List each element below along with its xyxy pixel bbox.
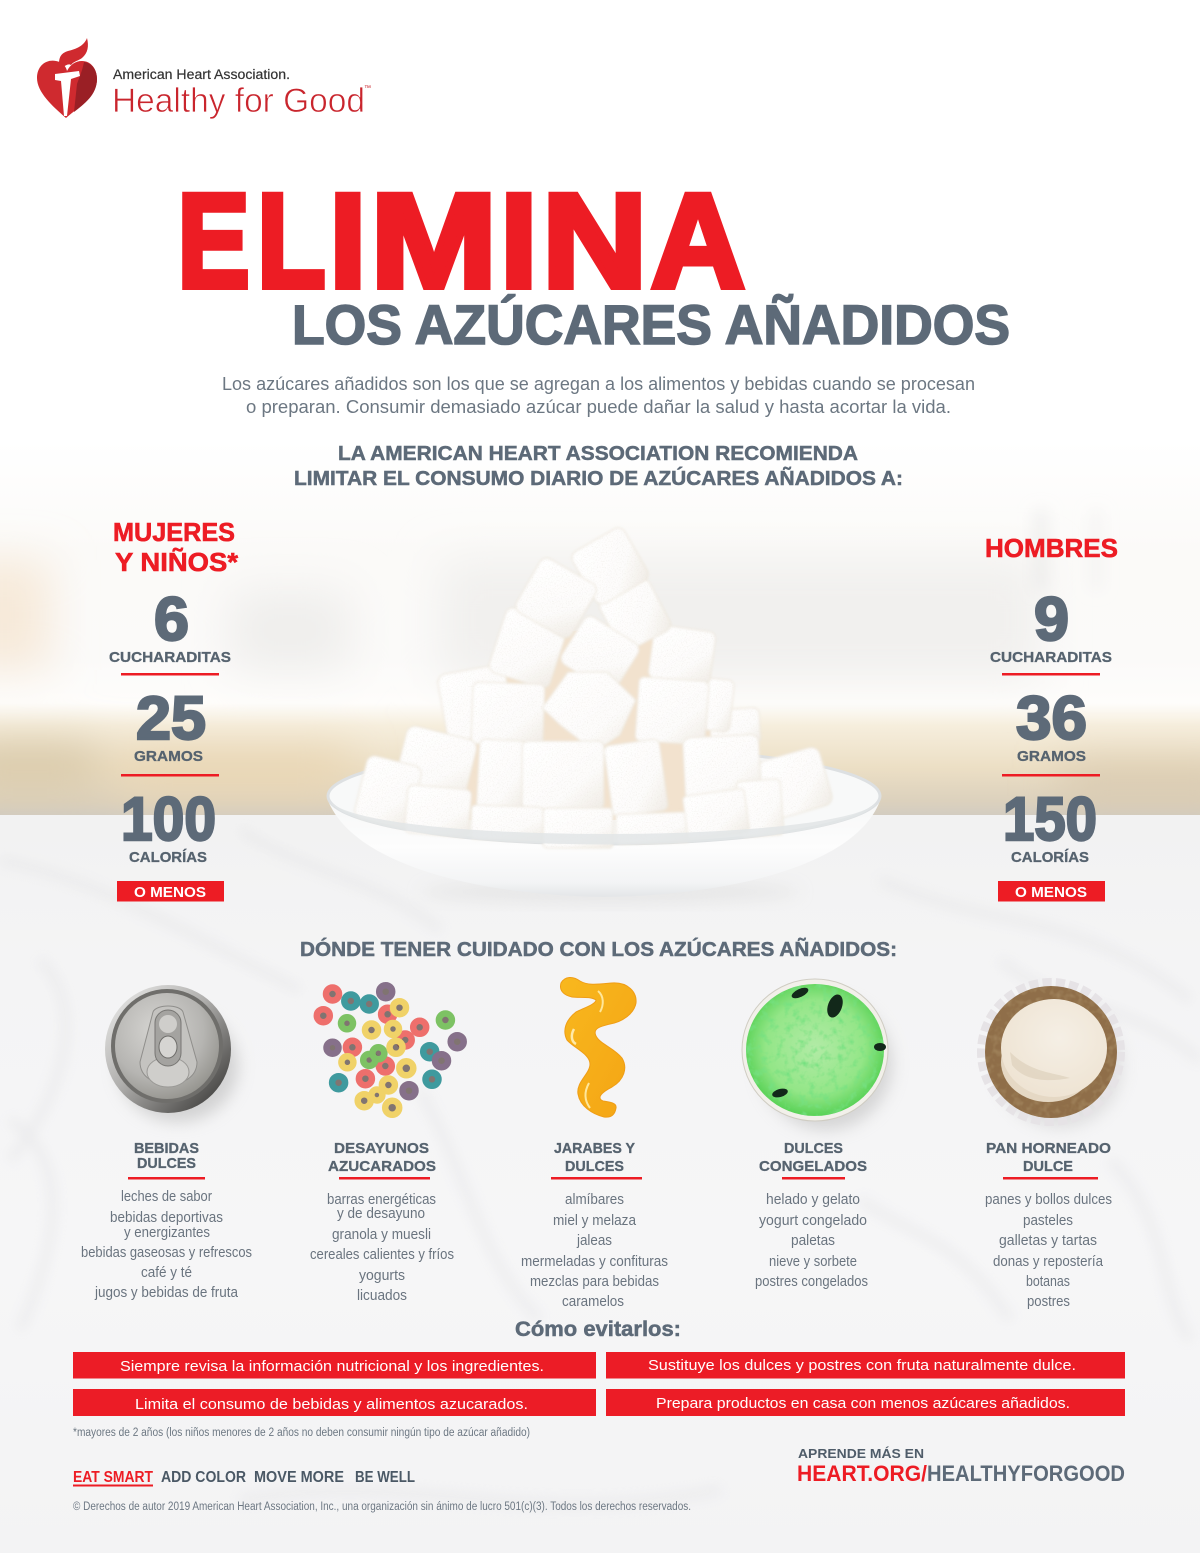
panel: sweet baked goods bbox=[983, 984, 1122, 1310]
badge: o menos bbox=[117, 881, 224, 902]
footer nav: eat smart, add color, move more, be well: BE WELL bbox=[355, 1469, 415, 1486]
list: desayunos azucarados: barras energéticas bbox=[327, 1192, 436, 1208]
heading: dulces congelados: CONGELADOS bbox=[759, 1158, 867, 1175]
recommendation heading bbox=[294, 442, 903, 490]
intro paragraph bbox=[222, 374, 975, 417]
call to action: heart.org/healthyforgood: HEART.ORG/ bbox=[797, 1461, 927, 1486]
title: ELIMINA: I bbox=[500, 167, 538, 316]
panel: syrups and sweets bbox=[521, 977, 668, 1310]
title: ELIMINA: E bbox=[177, 167, 250, 316]
footer nav: eat smart, add color, move more, be well bbox=[73, 1469, 415, 1486]
stat: 6 cucharaditas: CUCHARADITAS bbox=[109, 649, 231, 666]
intro paragraph: Los azúcares añadidos son los que se agregan a los alimentos y bebidas cuando se procesan bbox=[222, 374, 975, 394]
stat: 36 gramos bbox=[1002, 684, 1100, 776]
call to action: heart.org/healthyforgood bbox=[797, 1446, 1125, 1486]
stat: 150 calorías: 150 bbox=[1003, 785, 1097, 853]
footer nav: eat smart, add color, move more, be well: ADD COLOR bbox=[161, 1469, 246, 1486]
heading: pan horneado dulce bbox=[986, 1140, 1111, 1180]
list: pan horneado dulce: botanas bbox=[1026, 1274, 1070, 1290]
heading: mujeres y niños: MUJERES bbox=[113, 517, 235, 547]
stat: 100 calorías: CALORÍAS bbox=[129, 849, 207, 866]
list: jarabes y dulces: mermeladas y confituras bbox=[521, 1254, 668, 1270]
illustration: bowl of sugar cubes bbox=[327, 525, 881, 904]
logo text: Healthy for Good: Healthy for Good bbox=[112, 82, 365, 120]
list: pan horneado dulce: panes y bollos dulces bbox=[985, 1192, 1112, 1208]
heading: desayunos azucarados: AZUCARADOS bbox=[328, 1158, 436, 1175]
heading: dulces congelados bbox=[759, 1140, 867, 1180]
recommendation heading: LA AMERICAN HEART ASSOCIATION RECOMIENDA bbox=[338, 442, 858, 465]
list: jarabes y dulces: miel y melaza bbox=[553, 1213, 637, 1229]
section heading: where to watch for sugars: DÓNDE TENER CUIDADO CON LOS AZÚCARES AÑADIDOS: bbox=[300, 937, 897, 961]
list: pan horneado dulce: postres bbox=[1027, 1294, 1070, 1310]
stat: 9 cucharaditas: CUCHARADITAS bbox=[990, 649, 1112, 666]
list: jarabes y dulces: mezclas para bebidas bbox=[530, 1274, 659, 1290]
icon: heart and torch bbox=[37, 38, 97, 118]
subtitle: los azúcares añadidos: LOS AZÚCARES AÑADIDOS bbox=[292, 293, 1010, 356]
heading: jarabes y dulces: JARABES Y bbox=[554, 1140, 635, 1157]
stat: 25 gramos: 25 bbox=[136, 684, 206, 752]
title: ELIMINA: N bbox=[542, 167, 647, 316]
heading: bebidas dulces: BEBIDAS bbox=[134, 1140, 199, 1157]
sugar cubes bbox=[353, 525, 834, 848]
stat: 6 cucharaditas bbox=[109, 585, 231, 676]
list: bebidas dulces: café y té bbox=[141, 1265, 192, 1281]
heading: mujeres y niños bbox=[113, 517, 239, 577]
title: ELIMINA: I bbox=[329, 167, 366, 316]
panel: men limits bbox=[985, 533, 1118, 902]
icon: honey syrup swirl bbox=[560, 977, 636, 1117]
panel: frozen sweets bbox=[742, 979, 892, 1290]
footer nav: eat smart, add color, move more, be well: EAT SMART bbox=[73, 1469, 153, 1486]
logo trademark: ™ bbox=[364, 85, 371, 92]
list: desayunos azucarados: granola y muesli bbox=[332, 1227, 431, 1243]
copyright: © Derechos de autor 2019 American Heart Association, Inc., una organización sin ánimo de lucro 501(c)(3). Todos los derechos reservados. bbox=[73, 1501, 691, 1513]
list: bebidas dulces: jugos y bebidas de fruta bbox=[94, 1285, 239, 1301]
heading: hombres: HOMBRES bbox=[985, 533, 1118, 563]
title: ELIMINA: L bbox=[257, 167, 326, 316]
list: bebidas dulces: bebidas deportivas bbox=[110, 1210, 223, 1226]
list: desayunos azucarados bbox=[310, 1192, 454, 1304]
warm shadow inside the pile bbox=[420, 620, 760, 820]
heading: desayunos azucarados bbox=[328, 1140, 436, 1180]
stat: 6 cucharaditas: 6 bbox=[154, 585, 189, 653]
heading: pan horneado dulce: DULCE bbox=[1023, 1158, 1073, 1175]
tip: prepara productos en casa: Prepara productos en casa con menos azúcares añadidos. bbox=[656, 1395, 1070, 1412]
heading: mujeres y niños: Y NIÑOS* bbox=[115, 547, 239, 577]
stat: 36 gramos: 36 bbox=[1016, 684, 1087, 752]
title: ELIMINA: M bbox=[370, 167, 497, 316]
list: dulces congelados: postres congelados bbox=[755, 1274, 868, 1290]
call to action: heart.org/healthyforgood: APRENDE MÁS EN bbox=[798, 1446, 924, 1461]
bowl rim front bbox=[328, 798, 880, 844]
panel: women and children limits bbox=[109, 517, 239, 902]
heading: bebidas dulces bbox=[128, 1140, 205, 1180]
list: dulces congelados bbox=[755, 1192, 868, 1290]
tip: limita el consumo bbox=[73, 1389, 596, 1416]
list: bebidas dulces: leches de sabor bbox=[121, 1189, 212, 1205]
stat: 100 calorías: 100 bbox=[121, 785, 216, 853]
list: dulces congelados: helado y gelato bbox=[766, 1192, 860, 1208]
list: desayunos azucarados: cereales calientes y fríos bbox=[310, 1247, 454, 1263]
list: jarabes y dulces: caramelos bbox=[562, 1294, 624, 1310]
list: dulces congelados: paletas bbox=[791, 1233, 835, 1249]
heading: jarabes y dulces: DULCES bbox=[565, 1158, 624, 1175]
badge: o menos: O MENOS bbox=[1015, 885, 1087, 901]
badge: o menos: O MENOS bbox=[134, 885, 206, 901]
list: pan horneado dulce bbox=[985, 1192, 1112, 1310]
panel: tips bbox=[73, 1352, 1125, 1416]
call to action: heart.org/healthyforgood: HEALTHYFORGOOD bbox=[927, 1461, 1125, 1486]
list: jarabes y dulces bbox=[521, 1192, 668, 1310]
icon: fruit cereal rings bbox=[317, 985, 464, 1115]
tip: revisa la información nutricional bbox=[73, 1352, 596, 1378]
list: jarabes y dulces: almíbares bbox=[565, 1192, 624, 1208]
logo text: American Heart Association: American Heart Association. bbox=[113, 67, 290, 82]
heading: dulces congelados: DULCES bbox=[784, 1140, 843, 1157]
footnote: *mayores de 2 años (los niños menores de 2 años no deben consumir ningún tipo de azúcar añadido) bbox=[73, 1427, 530, 1439]
list: dulces congelados: yogurt congelado bbox=[759, 1213, 867, 1229]
footer nav: eat smart, add color, move more, be well: MOVE MORE bbox=[254, 1469, 344, 1486]
stat: 9 cucharaditas bbox=[990, 585, 1112, 676]
stat: 25 gramos: GRAMOS bbox=[134, 748, 203, 765]
stat: 25 gramos bbox=[121, 684, 219, 776]
list: pan horneado dulce: galletas y tartas bbox=[999, 1233, 1097, 1249]
list: desayunos azucarados: yogurts bbox=[359, 1268, 405, 1284]
bowl shadow bbox=[420, 880, 800, 904]
panel: sweet drinks bbox=[81, 985, 252, 1301]
heading: pan horneado dulce: PAN HORNEADO bbox=[986, 1140, 1111, 1157]
list: bebidas dulces: bebidas gaseosas y refrescos bbox=[81, 1245, 252, 1261]
list: desayunos azucarados: licuados bbox=[357, 1288, 407, 1304]
tip: prepara productos en casa bbox=[606, 1389, 1125, 1416]
icon: cupcake bbox=[983, 984, 1122, 1128]
tip: sustituye los dulces: Sustituye los dulces y postres con fruta naturalmente dulce. bbox=[648, 1357, 1076, 1374]
stat: 9 cucharaditas: 9 bbox=[1034, 585, 1069, 653]
list: dulces congelados: nieve y sorbete bbox=[769, 1254, 857, 1270]
heading: jarabes y dulces bbox=[551, 1140, 642, 1180]
glass bowl rim bbox=[328, 748, 880, 844]
badge: o menos bbox=[998, 881, 1105, 902]
glass bowl body bbox=[327, 798, 881, 897]
heading: cómo evitarlos: Cómo evitarlos: bbox=[515, 1318, 681, 1341]
list: desayunos azucarados: y de desayuno bbox=[337, 1206, 425, 1222]
list: pan horneado dulce: pasteles bbox=[1023, 1213, 1073, 1229]
heading: desayunos azucarados: DESAYUNOS bbox=[334, 1140, 429, 1157]
heading: bebidas dulces: DULCES bbox=[137, 1155, 196, 1172]
stat: 36 gramos: GRAMOS bbox=[1017, 748, 1086, 765]
title: ELIMINA: A bbox=[651, 167, 745, 316]
intro paragraph: o preparan. Consumir demasiado azúcar puede dañar la salud y hasta acortar la vida. bbox=[246, 397, 951, 417]
tip: revisa la información nutricional: Siempre revisa la información nutricional y los ingredientes. bbox=[120, 1358, 544, 1375]
stat: 150 calorías: CALORÍAS bbox=[1011, 849, 1089, 866]
list: pan horneado dulce: donas y repostería bbox=[993, 1254, 1104, 1270]
icon: soda can bbox=[105, 985, 238, 1122]
list: jarabes y dulces: jaleas bbox=[576, 1233, 612, 1249]
panel: sugary breakfasts bbox=[310, 985, 464, 1304]
tip: sustituye los dulces bbox=[606, 1352, 1125, 1378]
list: bebidas dulces: y energizantes bbox=[124, 1225, 210, 1241]
icon: mint chip ice cream cup bbox=[742, 979, 892, 1130]
tip: limita el consumo: Limita el consumo de bebidas y alimentos azucarados. bbox=[135, 1396, 528, 1413]
recommendation heading: LIMITAR EL CONSUMO DIARIO DE AZÚCARES AÑADIDOS A: bbox=[294, 466, 903, 490]
logo: American Heart Association Healthy for Good bbox=[37, 38, 371, 120]
list: bebidas dulces bbox=[81, 1189, 252, 1301]
